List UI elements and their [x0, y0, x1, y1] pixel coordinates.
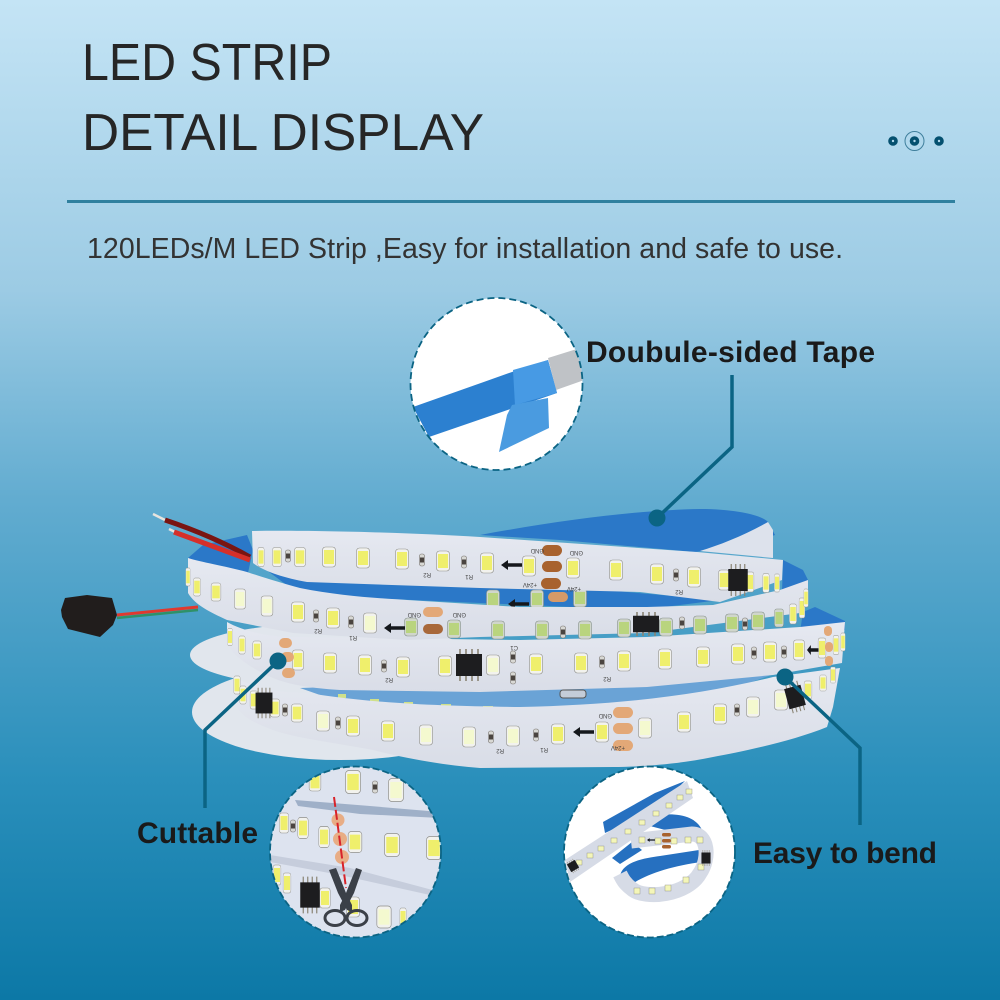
leader line: bend — [785, 677, 860, 825]
strip layer 3: R2 — [603, 675, 611, 681]
label: cuttable: Cuttable — [137, 817, 258, 850]
strip layer 1: GND — [530, 547, 544, 553]
icon: three dots — [890, 132, 942, 150]
callout: easy to bend — [564, 668, 937, 938]
strip layer 3: C1 — [510, 644, 518, 650]
circle: tape detail — [410, 298, 590, 470]
strip layer 1: +24V — [567, 585, 581, 591]
label: tape: Doubule-sided Tape — [586, 336, 875, 369]
strip layer 2: R2 — [314, 627, 322, 633]
strip layer 1: R2 — [423, 571, 431, 577]
cable and connector — [61, 595, 198, 637]
LED strip coil photo — [61, 509, 845, 768]
hidden LEDs in gaps — [338, 589, 586, 710]
callout: cuttable — [137, 652, 441, 938]
strip layer 3: R2 — [385, 676, 393, 682]
leader line: cuttable — [205, 661, 278, 808]
pale reel discs — [190, 623, 488, 760]
strip layer 3 — [227, 622, 845, 692]
strip layer 1: +24V — [523, 581, 537, 587]
strip layer 2: R1 — [349, 634, 357, 640]
title — [82, 34, 484, 162]
title: LED STRIP — [82, 34, 332, 92]
strip layer 2: GND — [452, 611, 466, 617]
circle: cut detail — [270, 766, 441, 938]
strip layer 4: +24V — [611, 744, 625, 750]
strip layer 1: GND — [569, 549, 583, 555]
label: bend: Easy to bend — [753, 837, 937, 870]
icon: scissors — [325, 868, 367, 926]
strip layer 4: R1 — [540, 746, 548, 752]
leader line: tape — [657, 375, 732, 518]
title: DETAIL DISPLAY — [82, 104, 484, 162]
strip layer 1: R2 — [675, 588, 683, 594]
power wires — [153, 514, 250, 560]
strip layer 2: GND — [407, 611, 421, 617]
strip layer 2 — [186, 558, 808, 640]
strip layer 4: GND — [598, 712, 612, 718]
callout: double-sided tape — [410, 298, 875, 526]
subtitle: 120LEDs/M LED Strip ,Easy for installation and safe to use. — [87, 233, 843, 265]
strip layer 1 — [252, 522, 783, 602]
strip layer 4: R2 — [496, 747, 504, 753]
strip layer 1: R1 — [465, 573, 473, 579]
blue tape back — [188, 509, 845, 712]
circle: bend detail — [564, 766, 735, 938]
strip layer 4 — [233, 667, 840, 768]
